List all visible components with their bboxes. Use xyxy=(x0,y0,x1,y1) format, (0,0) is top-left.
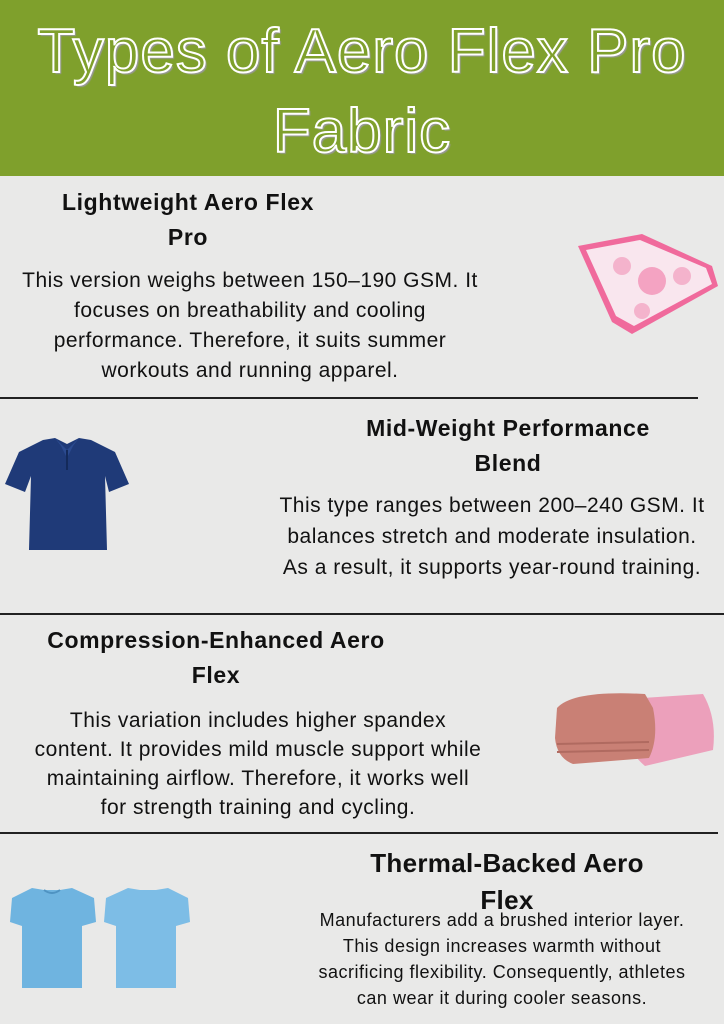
section 2 text: As a result, it supports year-round training. xyxy=(283,556,701,579)
icon: navy polo shirt xyxy=(5,438,129,550)
section 3 heading: Flex xyxy=(192,662,240,688)
icon: pink scarf xyxy=(578,234,718,334)
section 3 text: maintaining airflow. Therefore, it works well xyxy=(47,767,469,790)
section 1 text xyxy=(22,269,478,382)
section 1 text: performance. Therefore, it suits summer xyxy=(54,329,446,352)
section 2 heading: Blend xyxy=(475,450,541,476)
section 2 heading xyxy=(366,415,650,476)
section 1 heading: Pro xyxy=(168,224,208,250)
section 3 text: This variation includes higher spandex xyxy=(70,709,446,732)
section 4 heading: Thermal-Backed Aero xyxy=(370,848,644,878)
section 3 heading: Compression-Enhanced Aero xyxy=(47,627,385,653)
section 2 text: balances stretch and moderate insulation. xyxy=(287,525,697,548)
section 1 text: This version weighs between 150–190 GSM. It xyxy=(22,269,478,292)
section 4 text xyxy=(318,910,686,1008)
title xyxy=(37,17,687,166)
icon: pink towels xyxy=(555,693,714,766)
section 4 heading: Flex xyxy=(480,885,534,915)
section 4 text: This design increases warmth without xyxy=(343,936,661,956)
section 2 text: This type ranges between 200–240 GSM. It xyxy=(279,494,705,517)
section 1 text: workouts and running apparel. xyxy=(101,359,398,382)
section 4 heading xyxy=(370,848,644,915)
section 1 heading: Lightweight Aero Flex xyxy=(62,189,314,215)
header banner xyxy=(0,0,724,176)
section 2 text xyxy=(279,494,705,579)
section 3 text: content. It provides mild muscle support while xyxy=(35,738,481,761)
section 3 text xyxy=(35,709,481,819)
icon: blue t-shirts xyxy=(10,888,190,988)
section 4 text: can wear it during cooler seasons. xyxy=(357,988,647,1008)
section 2 heading: Mid-Weight Performance xyxy=(366,415,650,441)
section 4 text: Manufacturers add a brushed interior layer. xyxy=(320,910,684,930)
section 1 heading xyxy=(62,189,314,250)
section 3 text: for strength training and cycling. xyxy=(101,796,415,819)
section 4 text: sacrificing flexibility. Consequently, athletes xyxy=(318,962,686,982)
title: Fabric xyxy=(273,97,451,166)
section 3 heading xyxy=(47,627,385,688)
section 1 text: focuses on breathability and cooling xyxy=(74,299,426,322)
title: Types of Aero Flex Pro xyxy=(37,17,687,86)
